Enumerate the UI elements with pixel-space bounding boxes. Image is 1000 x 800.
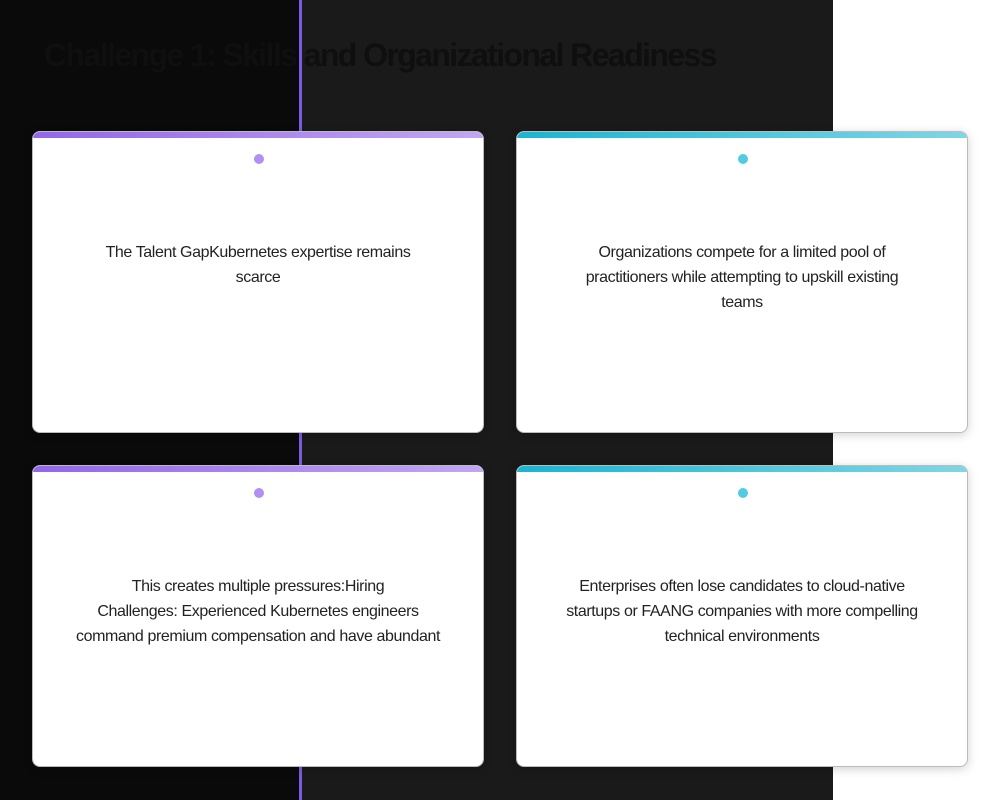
card text — [566, 578, 918, 645]
card text: Enterprises often lose candidates to cloud-native — [579, 578, 905, 595]
card: talent gap — [32, 131, 484, 433]
dot icon — [738, 154, 748, 164]
card: compete — [516, 131, 968, 433]
card text: command premium compensation and have abundant — [76, 628, 440, 645]
card text — [586, 244, 898, 311]
card text: startups or FAANG companies with more compelling — [566, 603, 918, 620]
title: Challenge 1: Skills and Organizational Readiness — [44, 37, 716, 73]
card text — [106, 244, 410, 286]
card text: Organizations compete for a limited pool of — [599, 244, 885, 261]
card text: teams — [721, 294, 763, 311]
card text: This creates multiple pressures:Hiring — [132, 578, 384, 595]
card text: scarce — [236, 269, 280, 286]
card text: practitioners while attempting to upskill existing — [586, 269, 898, 286]
card: pressures — [32, 465, 484, 767]
card text: The Talent GapKubernetes expertise remains — [106, 244, 410, 261]
card text: Challenges: Experienced Kubernetes engineers — [97, 603, 419, 620]
dot icon — [254, 488, 264, 498]
card text — [76, 578, 440, 645]
card text: technical environments — [665, 628, 819, 645]
dot icon — [254, 154, 264, 164]
dot icon — [738, 488, 748, 498]
card: enterprises — [516, 465, 968, 767]
